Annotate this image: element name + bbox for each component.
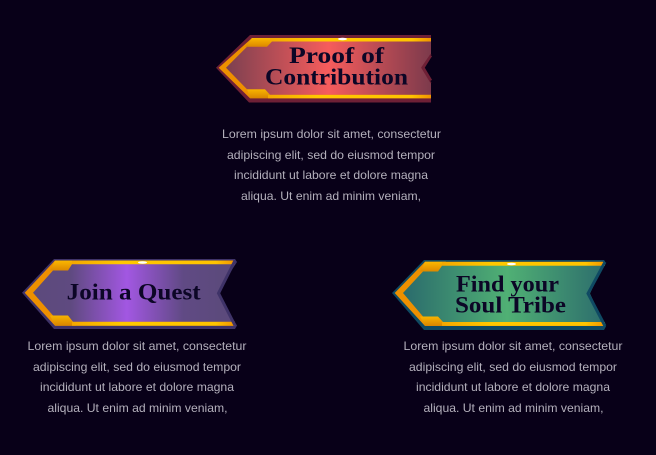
text block: top description: Lorem ipsum dolor sit amet, consectetur (222, 127, 441, 141)
text block: right description: incididunt ut labore et dolore magna (416, 380, 610, 394)
text block: top description: aliqua. Ut enim ad minim veniam, (241, 189, 421, 203)
heading: Find your Soul Tribe: Find your (456, 272, 559, 298)
highlight (338, 38, 347, 40)
text block: left description: incididunt ut labore et dolore magna (40, 380, 234, 394)
text block: right description: Lorem ipsum dolor sit amet, consectetur (404, 339, 623, 353)
text block: right description: aliqua. Ut enim ad minim veniam, (424, 401, 604, 415)
text block: left description: adipiscing elit, sed do eiusmod tempor (33, 360, 241, 374)
highlight (507, 263, 516, 265)
banner: Proof of Contribution (216, 35, 431, 102)
text block: left description: Lorem ipsum dolor sit amet, consectetur (28, 339, 247, 353)
text block: right description: adipiscing elit, sed do eiusmod tempor (409, 360, 617, 374)
corner and edge bands (420, 262, 446, 272)
banner: Find your Soul Tribe (392, 260, 606, 330)
heading: Proof of Contribution: Proof of (289, 43, 385, 69)
heading: Proof of Contribution: Contribution (265, 64, 408, 90)
text block: top description: incididunt ut labore et dolore magna (234, 168, 428, 182)
text block: top description: adipiscing elit, sed do eiusmod tempor (227, 148, 435, 162)
heading: Find your Soul Tribe: Soul Tribe (455, 292, 566, 318)
text block: left description: aliqua. Ut enim ad minim veniam, (48, 401, 228, 415)
banner: Join a Quest (22, 259, 237, 329)
corner and edge bands (50, 260, 76, 270)
corner and edge bands (245, 38, 275, 47)
highlight (138, 261, 147, 264)
heading: Join a Quest: Join a Quest (67, 279, 201, 305)
